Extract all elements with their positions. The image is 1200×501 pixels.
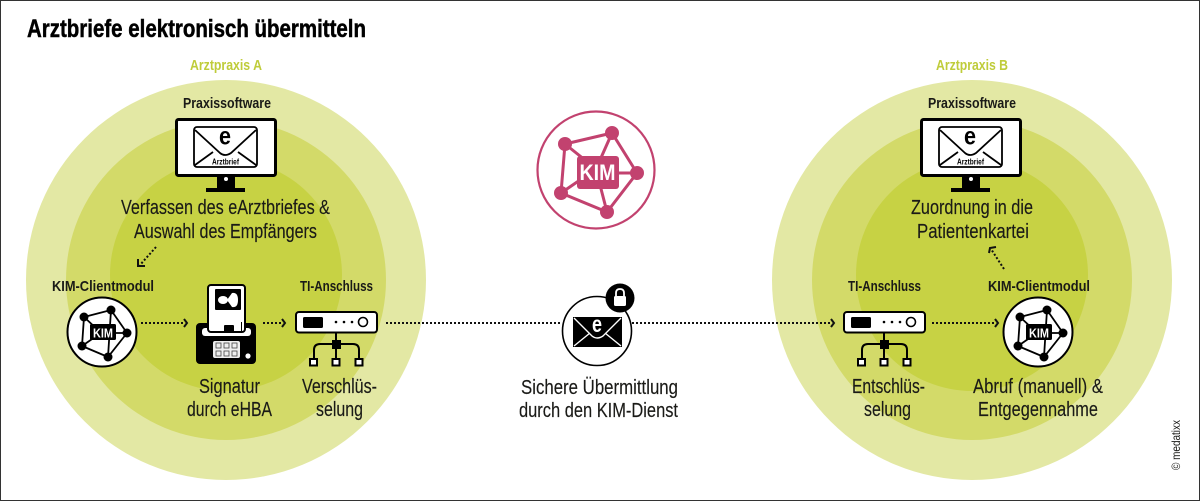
label: KIM-Clientmodul B: KIM-Clientmodul xyxy=(988,278,1090,295)
text: Zuordnung xyxy=(911,197,1033,243)
text: Signatur durch eHBA: Signatur xyxy=(199,376,260,398)
arrow: client module to Zuordnung B xyxy=(989,247,1004,269)
icon: KIM module B xyxy=(1004,298,1072,366)
icon: monitor A xyxy=(176,120,276,192)
label: KIM-Clientmodul A: KIM-Clientmodul xyxy=(52,278,154,295)
text: Verfassen: Verfassen des eArztbriefes & xyxy=(121,197,331,219)
icon: KIM module B: KIM xyxy=(1029,326,1049,340)
icon: monitor A: e xyxy=(219,122,231,150)
credit: © medatixx xyxy=(1169,420,1183,470)
text: Verfassen xyxy=(121,197,331,243)
text: Sichere Übermittlung xyxy=(519,377,678,422)
icon: monitor B: Arztbrief xyxy=(957,158,984,166)
heading: Arztpraxis B: Arztpraxis B xyxy=(936,57,1008,74)
text: Verschlüsselung: Verschlüs- xyxy=(302,376,377,398)
icon: TI connector A xyxy=(296,312,377,366)
text: Sichere Übermittlung: Sichere Übermittlung xyxy=(521,377,678,399)
arrow: TI connector A to envelope xyxy=(386,322,562,324)
icon: monitor B: e xyxy=(964,122,976,150)
icon: secure envelope: e xyxy=(592,311,602,337)
panel: Arztpraxis A circles xyxy=(26,80,426,480)
icon: KIM logo: KIM xyxy=(580,160,616,185)
arrow: eHBA to TI connector xyxy=(263,319,285,327)
arrow: client module to Verfassen A xyxy=(138,247,156,266)
text: Signatur durch eHBA: durch eHBA xyxy=(187,399,273,421)
heading: Arztpraxis A: Arztpraxis A xyxy=(190,57,262,74)
text: Verschlüsselung xyxy=(302,376,377,421)
text: Verfassen: Auswahl des Empfängers xyxy=(134,221,317,243)
panel: Arztpraxis B circles xyxy=(772,80,1172,480)
arrow: KIM module to eHBA xyxy=(141,319,187,327)
icon: monitor B xyxy=(922,120,1020,192)
icon: eHBA card reader xyxy=(196,285,256,364)
text: Sichere Übermittlung: durch den KIM-Dienst xyxy=(519,400,678,422)
icon: TI connector B xyxy=(844,312,925,366)
text: Abruf und Entgegennahme: Abruf (manuell) & xyxy=(973,376,1104,398)
text: Abruf und Entgegennahme xyxy=(973,376,1104,421)
text: Entschlüsselung: Entschlüs- xyxy=(852,376,925,398)
title: Arztbriefe elektronisch übermitteln xyxy=(27,15,366,43)
icon: monitor A: Arztbrief xyxy=(212,158,239,166)
label: TI-Anschluss B: TI-Anschluss xyxy=(848,278,921,295)
arrow: envelope to TI connector B xyxy=(632,319,834,327)
label: Praxissoftware B: Praxissoftware xyxy=(928,95,1016,112)
text: Abruf und Entgegennahme: Entgegennahme xyxy=(978,399,1098,421)
icon: secure envelope xyxy=(562,284,634,366)
text: Zuordnung: Zuordnung in die xyxy=(911,197,1033,219)
text: Verschlüsselung: selung xyxy=(316,399,363,421)
icon: KIM logo xyxy=(538,112,654,228)
arrow: TI connector B to KIM module xyxy=(932,319,998,327)
label: Praxissoftware A: Praxissoftware xyxy=(183,95,271,112)
text: Entschlüsselung xyxy=(852,376,925,421)
icon: KIM module A: KIM xyxy=(93,326,113,340)
text: Zuordnung: Patientenkartei xyxy=(917,221,1029,243)
icon: KIM module A xyxy=(68,298,136,366)
label: TI-Anschluss A: TI-Anschluss xyxy=(300,278,373,295)
text: Entschlüsselung: selung xyxy=(864,399,911,421)
text: Signatur durch eHBA xyxy=(187,376,273,421)
